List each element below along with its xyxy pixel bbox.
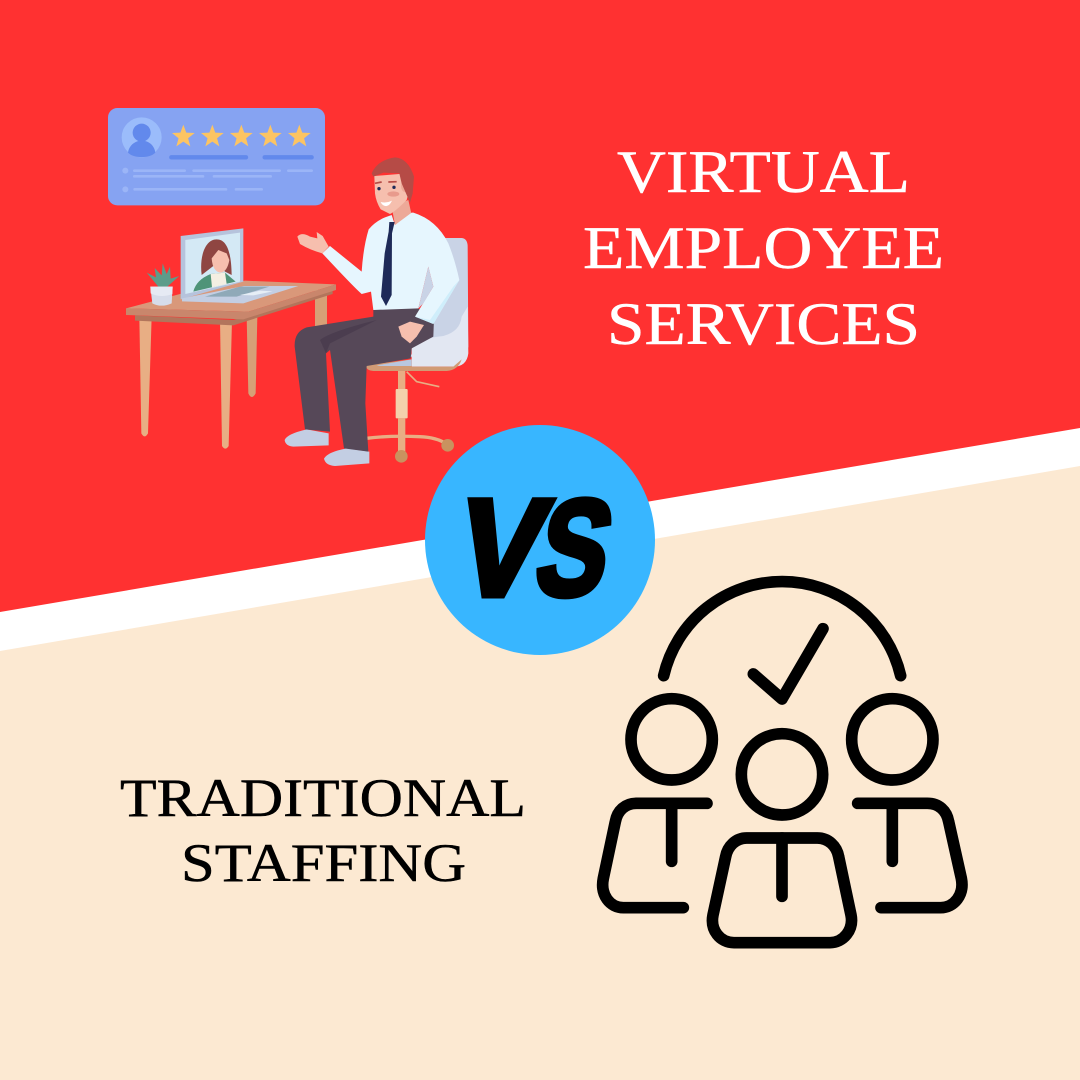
neck bbox=[392, 200, 412, 225]
VS badge: S bbox=[525, 472, 625, 625]
center person bbox=[712, 734, 852, 943]
left person bbox=[603, 699, 712, 908]
tie bbox=[381, 222, 395, 306]
brows bbox=[375, 182, 397, 183]
desk bbox=[126, 281, 336, 449]
panel: red upper section bbox=[0, 0, 1080, 612]
heading: Traditional Staffing: TRADITIONAL bbox=[120, 768, 526, 828]
arc bbox=[664, 582, 901, 676]
shirt bbox=[322, 213, 459, 324]
ear bbox=[401, 180, 409, 192]
icon: team with checkmark bbox=[603, 582, 962, 943]
heading: Traditional Staffing: STAFFING bbox=[181, 833, 466, 893]
shoes bbox=[285, 429, 329, 447]
illustration: virtual employee at desk bbox=[108, 108, 468, 466]
laptop with video call bbox=[181, 228, 298, 303]
VS badge: V bbox=[446, 472, 559, 625]
head bbox=[374, 173, 409, 214]
right person bbox=[852, 699, 962, 908]
hand gesture bbox=[297, 232, 329, 253]
checkmark bbox=[753, 629, 823, 699]
potted plant bbox=[147, 263, 179, 306]
trousers bbox=[295, 307, 434, 452]
heading: Virtual Employee Services: VIRTUAL bbox=[617, 139, 910, 205]
heading: Virtual Employee Services: EMPLOYEE bbox=[583, 215, 944, 281]
shirt shading bbox=[418, 267, 433, 308]
blush bbox=[387, 191, 399, 197]
heading: Virtual Employee Services: SERVICES bbox=[607, 291, 920, 357]
heading: Traditional Staffing bbox=[120, 768, 526, 893]
heading: Virtual Employee Services bbox=[583, 139, 944, 357]
hair bbox=[372, 157, 414, 203]
review card bbox=[108, 108, 325, 205]
seated man bbox=[285, 157, 459, 466]
chair bbox=[365, 238, 468, 463]
white diagonal band bbox=[0, 415, 1080, 651]
VS badge bbox=[425, 425, 655, 655]
hand on knee bbox=[398, 322, 424, 343]
smile bbox=[381, 201, 392, 206]
